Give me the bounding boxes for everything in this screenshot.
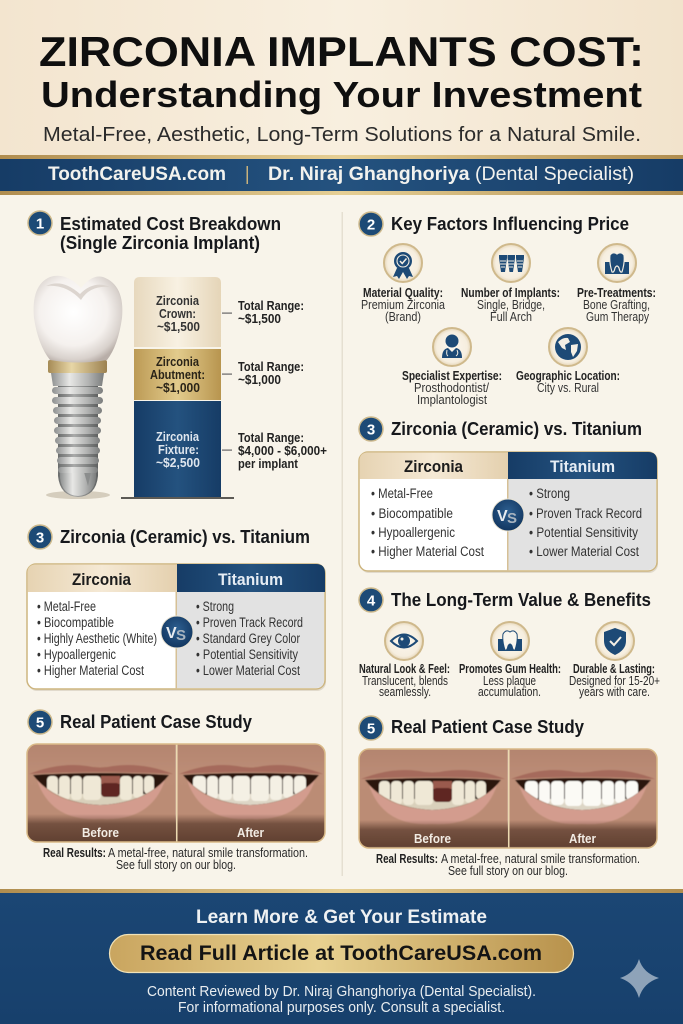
panel: case study left xyxy=(27,710,326,872)
zirconia column: • Higher Material Cost xyxy=(37,663,144,678)
text: durable: Designed for 15-20+ xyxy=(569,674,660,688)
icon: tooth in gum xyxy=(598,244,636,282)
titanium column xyxy=(196,571,303,678)
fixture segment: Zirconia xyxy=(156,429,200,444)
heading 5 right: 5 xyxy=(367,720,375,738)
photo: after xyxy=(177,744,326,842)
icon: shield xyxy=(596,622,634,660)
brand bar xyxy=(0,155,683,195)
text: material quality: Material Quality: xyxy=(363,285,443,300)
before and after photos right xyxy=(359,749,658,848)
text: gum health xyxy=(459,662,561,699)
titanium column: • Proven Track Record xyxy=(196,615,303,630)
text: specialist expertise: Specialist Expertise: xyxy=(402,368,502,383)
zirconia column: • Higher Material Cost xyxy=(371,544,484,559)
text: durable: years with care. xyxy=(579,685,650,699)
fixture segment: ~$2,500 xyxy=(156,455,200,470)
text: pre-treatments: Gum Therapy xyxy=(586,309,649,324)
heading 4: The Long-Term Value & Benefits xyxy=(391,590,651,610)
abutment segment xyxy=(134,349,221,400)
text: natural look xyxy=(359,662,450,699)
photo: before: Before xyxy=(82,825,119,840)
text: durable: Durable & Lasting: xyxy=(573,662,655,676)
button xyxy=(110,934,574,972)
caption right xyxy=(376,852,640,878)
heading 2: 2 xyxy=(367,216,375,234)
range labels: ~$1,000 xyxy=(238,372,281,387)
disclaimer: Content Reviewed by Dr. Niraj Ghanghoriya (Dental Specialist). xyxy=(147,984,536,1000)
panel: comparison right xyxy=(359,417,658,573)
header panel xyxy=(0,0,683,156)
heading 1: Estimated Cost Breakdown xyxy=(60,214,281,234)
title line 1: ZIRCONIA IMPLANTS COST: xyxy=(39,28,644,75)
text: number of implants xyxy=(461,285,560,324)
fixture segment xyxy=(134,401,221,498)
caption right: See full story on our blog. xyxy=(448,864,568,878)
text: material quality xyxy=(361,285,446,324)
abutment segment: Abutment: xyxy=(150,367,205,382)
icon: globe xyxy=(549,328,587,366)
text: geographic location xyxy=(516,368,620,395)
range labels xyxy=(222,298,327,471)
text: natural look: Natural Look & Feel: xyxy=(359,662,450,676)
text: number of implants: Number of Implants: xyxy=(461,285,560,300)
text: gum health: Promotes Gum Health: xyxy=(459,662,561,676)
zirconia column: Zirconia xyxy=(72,571,132,589)
zirconia column: • Highly Aesthetic (White) xyxy=(37,631,157,646)
VS badge: V xyxy=(497,508,508,525)
zirconia column: • Hypoallergenic xyxy=(37,647,116,662)
heading 3 right: 3 xyxy=(367,422,375,438)
range labels: per implant xyxy=(238,456,299,471)
heading 3 right: Zirconia (Ceramic) vs. Titanium xyxy=(391,419,642,439)
text: material quality: Premium Zirconia xyxy=(361,297,446,312)
footer panel xyxy=(0,889,683,1024)
text: natural look: Translucent, blends xyxy=(362,674,448,688)
caption right: Real Results: xyxy=(376,852,438,866)
heading 1 xyxy=(28,211,281,253)
text: pre-treatments: Bone Grafting, xyxy=(583,297,650,312)
heading 3 left: 3 xyxy=(36,530,44,546)
text: specialist expertise: Prosthodontist/ xyxy=(414,380,489,395)
zirconia column: • Biocompatible xyxy=(371,506,453,521)
crown segment: Crown: xyxy=(159,306,196,321)
specialist name: Dr. Niraj Ghanghoriya (Dental Specialist) xyxy=(268,164,634,185)
heading 5 right xyxy=(359,716,584,740)
before and after photos left xyxy=(27,744,326,842)
titanium column: • Lower Material Cost xyxy=(529,544,639,559)
text: geographic location: Geographic Location: xyxy=(516,368,620,383)
range labels: Total Range: xyxy=(238,298,304,313)
caption left: A metal-free, natural smile transformation. xyxy=(108,846,308,860)
heading 2: Key Factors Influencing Price xyxy=(391,214,629,234)
VS badge xyxy=(161,616,193,648)
panel: comparison left xyxy=(27,525,326,691)
fixture segment: Fixture: xyxy=(158,442,199,457)
text: gum health: Less plaque xyxy=(483,674,536,688)
VS badge xyxy=(492,499,524,531)
stacked cost bar xyxy=(121,277,234,499)
caption left xyxy=(43,846,308,872)
caption left: See full story on our blog. xyxy=(116,858,236,872)
titanium column: • Potential Sensitivity xyxy=(529,525,638,540)
title line 2: Understanding Your Investment xyxy=(41,74,642,115)
zirconia column: Zirconia xyxy=(404,458,464,476)
comparison table right xyxy=(359,452,658,573)
text: geographic location: City vs. Rural xyxy=(537,380,599,395)
text: specialist expertise: Implantologist xyxy=(417,392,487,407)
panel: key factors xyxy=(359,212,656,407)
range labels: Total Range: xyxy=(238,430,304,445)
titanium column xyxy=(529,458,642,559)
crown segment xyxy=(134,277,221,347)
heading 3 left: Zirconia (Ceramic) vs. Titanium xyxy=(60,527,310,547)
heading 4: 4 xyxy=(367,592,376,610)
icon: doctor xyxy=(433,328,471,366)
text: natural look: seamlessly. xyxy=(379,685,431,699)
photo: after: After xyxy=(237,825,264,840)
range labels: Total Range: xyxy=(238,359,304,374)
heading 1: 1 xyxy=(36,216,44,232)
comparison table left xyxy=(27,564,326,691)
photo: after xyxy=(509,749,658,848)
zirconia column: • Biocompatible xyxy=(37,615,114,630)
icon: implants xyxy=(492,244,530,282)
titanium column: • Potential Sensitivity xyxy=(196,647,298,662)
text: number of implants: Full Arch xyxy=(490,309,532,324)
zirconia column: • Metal-Free xyxy=(37,599,96,614)
panel: cost breakdown xyxy=(28,211,327,499)
text: durable xyxy=(569,662,660,699)
titanium column: • Standard Grey Color xyxy=(196,631,300,646)
titanium column: • Strong xyxy=(529,486,570,501)
heading 5 left xyxy=(28,710,252,734)
range labels: ~$1,500 xyxy=(238,311,281,326)
text: specialist expertise xyxy=(402,368,502,407)
photo: before: Before xyxy=(414,831,451,846)
photo: after: After xyxy=(569,831,596,846)
icon: gum health xyxy=(491,622,529,660)
zirconia column xyxy=(37,571,157,678)
icon: eye xyxy=(385,622,423,660)
icon: sparkle xyxy=(620,959,659,998)
heading 5 left: Real Patient Case Study xyxy=(60,712,252,732)
VS badge: S xyxy=(507,510,517,527)
text: pre-treatments: Pre-Treatments: xyxy=(577,285,656,300)
zirconia column xyxy=(371,458,484,559)
panel: case study right xyxy=(359,716,658,878)
panel: long-term value xyxy=(359,588,660,699)
photo: before xyxy=(27,744,176,842)
heading 5 right: Real Patient Case Study xyxy=(391,717,584,737)
icon: medal xyxy=(384,244,422,282)
VS badge: S xyxy=(176,627,186,644)
text: pre-treatments xyxy=(577,285,656,324)
text: material quality: (Brand) xyxy=(385,309,421,324)
titanium column: Titanium xyxy=(218,571,283,589)
zirconia column: • Hypoallergenic xyxy=(371,525,455,540)
site name: ToothCareUSA.com xyxy=(48,164,226,185)
abutment segment: Zirconia xyxy=(156,354,200,369)
disclaimer: For informational purposes only. Consult a specialist. xyxy=(178,1000,505,1016)
button: Read Full Article at ToothCareUSA.com xyxy=(140,942,542,965)
VS badge: V xyxy=(166,625,177,642)
text: number of implants: Single, Bridge, xyxy=(477,297,545,312)
crown segment: ~$1,500 xyxy=(157,319,200,334)
titanium column: • Proven Track Record xyxy=(529,506,642,521)
titanium column: Titanium xyxy=(550,458,615,476)
caption right: A metal-free, natural smile transformation. xyxy=(441,852,640,866)
heading 1: (Single Zirconia Implant) xyxy=(60,233,260,253)
disclaimer xyxy=(147,984,536,1016)
titanium column: • Strong xyxy=(196,599,234,614)
abutment segment: ~$1,000 xyxy=(156,380,200,395)
implant illustration xyxy=(34,276,122,499)
crown segment: Zirconia xyxy=(156,293,200,308)
call to action heading: Learn More & Get Your Estimate xyxy=(196,907,487,928)
range labels: $4,000 - $6,000+ xyxy=(238,443,327,458)
photo: before xyxy=(359,749,508,848)
subtitle: Metal-Free, Aesthetic, Long-Term Solutions for a Natural Smile. xyxy=(43,124,641,146)
zirconia column: • Metal-Free xyxy=(371,486,433,501)
titanium column: • Lower Material Cost xyxy=(196,663,300,678)
heading 5 left: 5 xyxy=(36,714,44,732)
text: gum health: accumulation. xyxy=(478,685,541,699)
caption left: Real Results: xyxy=(43,846,106,860)
